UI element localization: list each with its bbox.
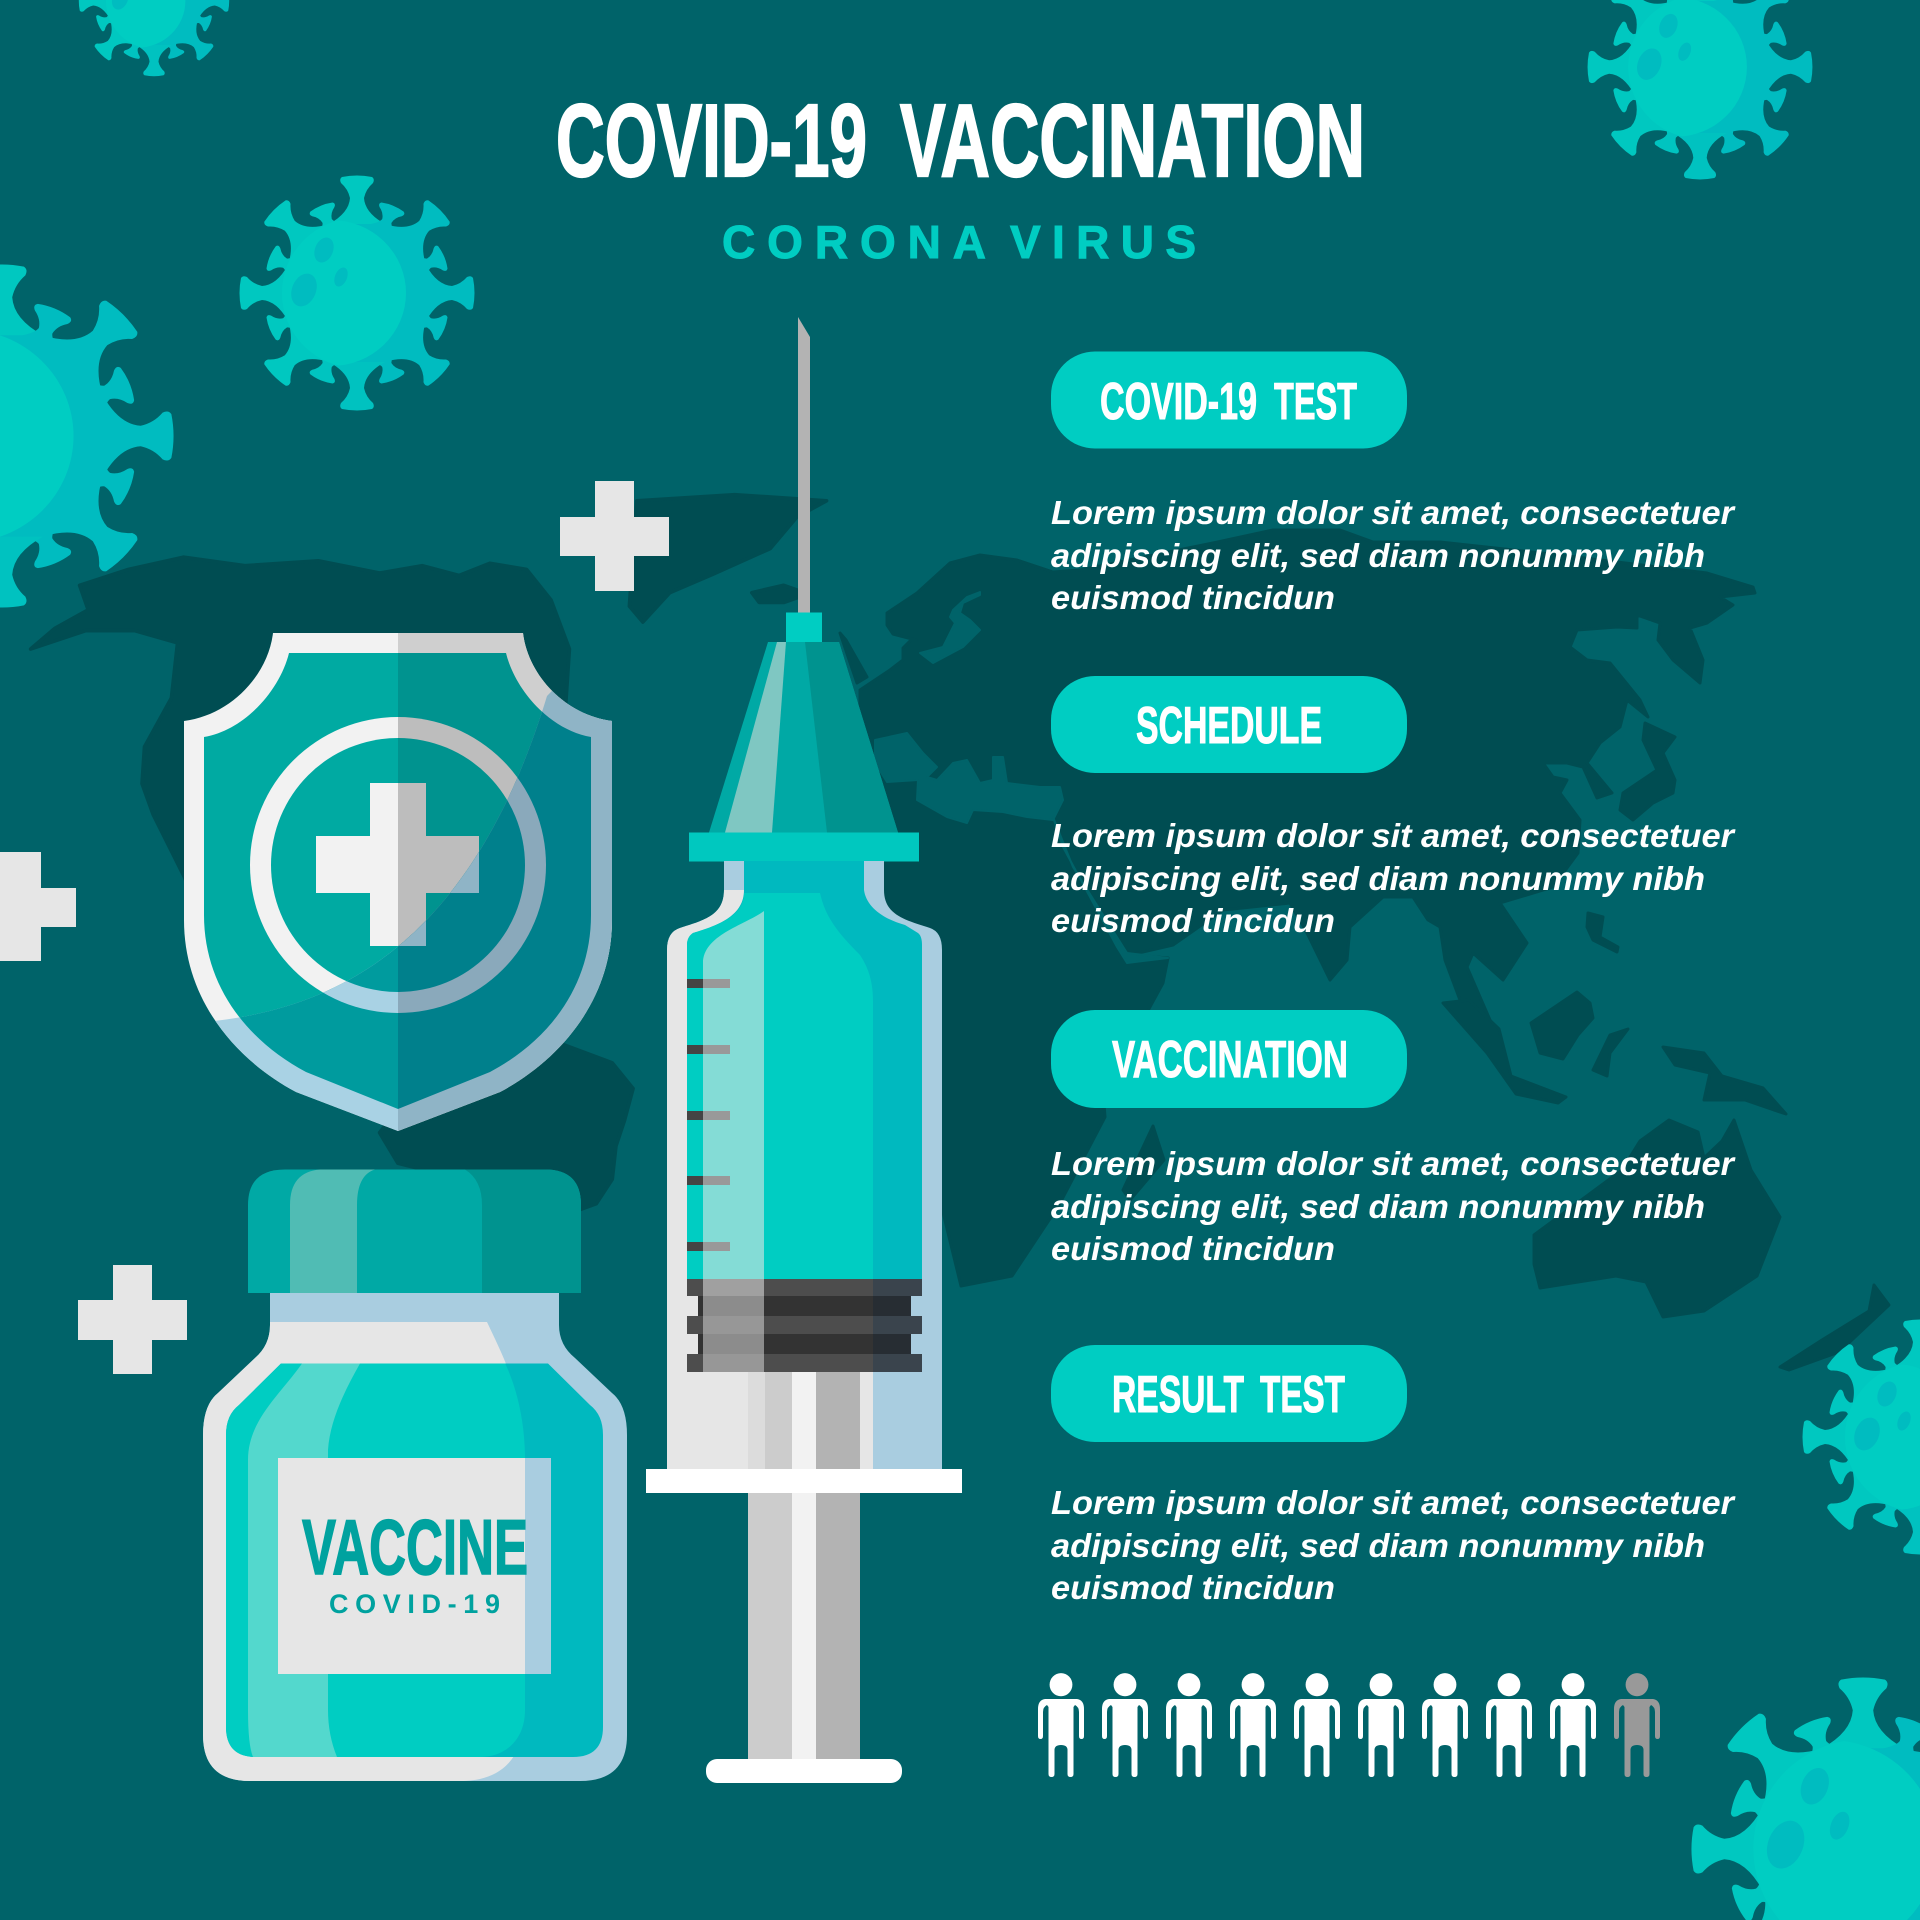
- description: adipiscing elit, sed diam nonummy nibh: [1051, 1527, 1705, 1564]
- description: Lorem ipsum dolor sit amet, consectetuer: [1051, 494, 1736, 531]
- shield: [184, 633, 612, 1131]
- step 3: vaccination: [1051, 1010, 1736, 1267]
- description: [1051, 817, 1736, 939]
- pill: VACCINATION: [1112, 1031, 1348, 1089]
- vial label: VACCINE: [302, 1503, 528, 1591]
- pill: TEST: [1274, 373, 1357, 431]
- pill: [1051, 1345, 1407, 1442]
- plus icon: top: [560, 481, 669, 591]
- needle: [798, 317, 810, 613]
- description: adipiscing elit, sed diam nonummy nibh: [1051, 860, 1705, 897]
- title: [556, 83, 1365, 198]
- step 4: result test: [1051, 1345, 1736, 1606]
- people pictogram: nine of ten: [1038, 1673, 1660, 1777]
- syringe piston: [687, 1279, 922, 1372]
- description: [1051, 1145, 1736, 1267]
- title: COVID-19: [556, 83, 867, 198]
- virus: top right: [1588, 0, 1812, 179]
- title: VACCINATION: [900, 83, 1365, 198]
- map seas: [875, 592, 1168, 963]
- vial label: [278, 1458, 551, 1674]
- step 1: covid-19 test: [1051, 352, 1736, 616]
- virus: top left: [79, 0, 229, 76]
- description: euismod tincidun: [1051, 902, 1335, 939]
- subtitle: CORONA: [722, 216, 986, 268]
- syringe scale ticks: [687, 979, 730, 1251]
- vial cap: [248, 1169, 581, 1293]
- description: [1051, 494, 1736, 616]
- description: Lorem ipsum dolor sit amet, consectetuer: [1051, 1484, 1736, 1521]
- virus: upper left small: [240, 176, 474, 410]
- vial label: COVID-19: [329, 1589, 500, 1619]
- subtitle: [722, 216, 1196, 268]
- vaccine vial: [200, 1169, 627, 1781]
- description: euismod tincidun: [1051, 1569, 1335, 1606]
- description: adipiscing elit, sed diam nonummy nibh: [1051, 537, 1705, 574]
- syringe liquid: [687, 861, 922, 1279]
- syringe barrel: [667, 861, 942, 1469]
- pill: COVID-19: [1100, 373, 1257, 431]
- virus: left large: [0, 264, 174, 608]
- description: euismod tincidun: [1051, 1230, 1335, 1267]
- vial liquid: [200, 1363, 603, 1757]
- syringe hub: [689, 612, 919, 862]
- pill: RESULT: [1112, 1366, 1244, 1424]
- subtitle: VIRUS: [1010, 216, 1196, 268]
- virus: right middle: [1802, 1320, 1920, 1554]
- description: Lorem ipsum dolor sit amet, consectetuer: [1051, 817, 1736, 854]
- pill: TEST: [1260, 1366, 1345, 1424]
- pill: [1051, 352, 1407, 448]
- world map: americas and greenland: [31, 495, 827, 1224]
- syringe plunger: [646, 1372, 962, 1783]
- step 2: schedule: [1051, 676, 1736, 939]
- world map: eurasia, africa, oceania: [840, 530, 1889, 1370]
- pill: [1051, 1010, 1407, 1108]
- description: adipiscing elit, sed diam nonummy nibh: [1051, 1188, 1705, 1225]
- description: euismod tincidun: [1051, 579, 1335, 616]
- vial glass: [200, 1293, 627, 1781]
- description: [1051, 1484, 1736, 1606]
- pill: SCHEDULE: [1136, 697, 1322, 755]
- syringe: [646, 317, 962, 1783]
- plus icon: bottom left: [78, 1265, 187, 1374]
- pill: [1051, 676, 1407, 773]
- plus icon: left: [0, 852, 76, 961]
- virus: bottom right: [1691, 1677, 1920, 1920]
- description: Lorem ipsum dolor sit amet, consectetuer: [1051, 1145, 1736, 1182]
